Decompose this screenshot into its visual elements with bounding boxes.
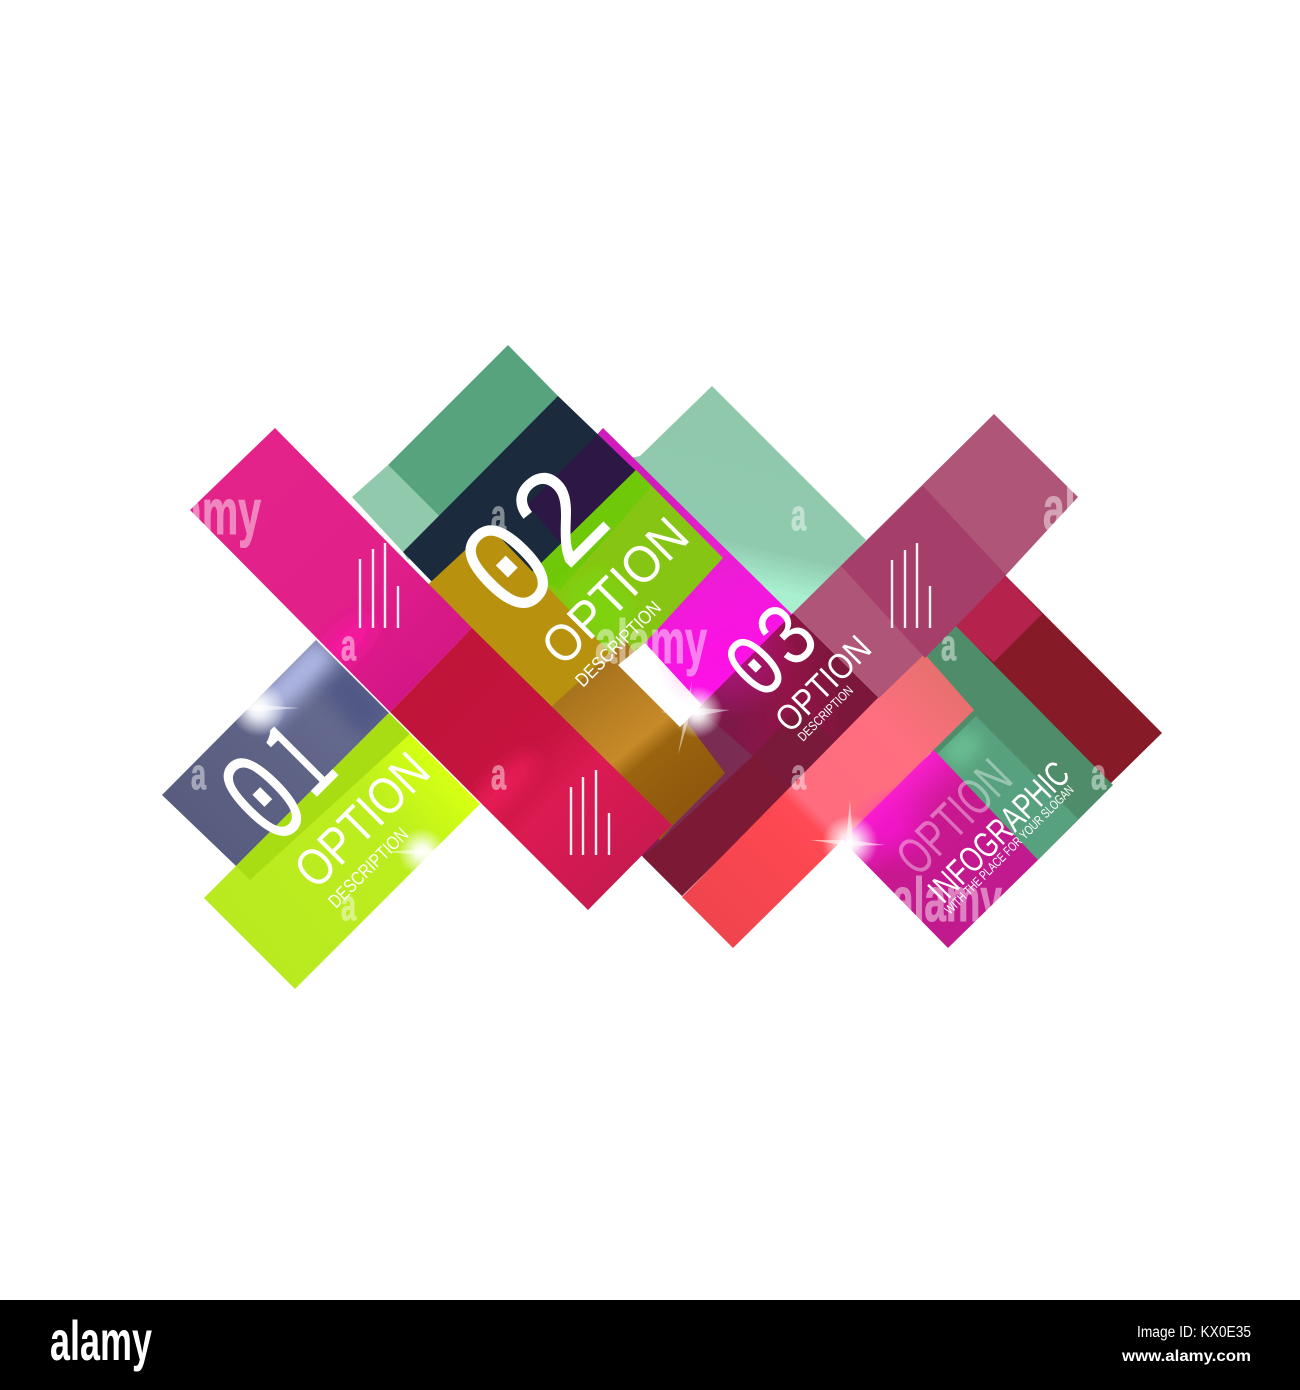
watermark: a	[191, 750, 206, 799]
number 03: 03	[707, 586, 843, 723]
heading: option 1: OPTION	[283, 742, 441, 899]
lens flares	[215, 680, 885, 876]
footer logo: alamy	[50, 1309, 152, 1372]
icon: bar lines centre	[571, 770, 609, 855]
glow accents	[655, 580, 940, 875]
watermark: a	[491, 491, 506, 540]
panel: top green band	[352, 345, 565, 560]
panel: slate band	[162, 636, 395, 866]
number 01: 0	[192, 727, 345, 880]
panel: long pink and crimson band	[190, 428, 672, 910]
panel: option 1 lime band	[204, 713, 480, 989]
number 01: 1	[220, 680, 365, 825]
option 2 text	[432, 440, 700, 692]
panel: mauve band	[793, 414, 1078, 698]
panel: coral band	[682, 652, 974, 948]
image id: Image ID: KX0E35	[1137, 1324, 1251, 1341]
panel: navy band	[403, 396, 636, 600]
panel: white gap	[618, 643, 702, 727]
heading: option 3: OPTION	[767, 627, 879, 740]
watermark: a	[791, 491, 806, 540]
icon: bar lines right	[892, 543, 930, 628]
panel: dark red band	[950, 570, 1162, 786]
panel: magenta band	[510, 428, 810, 730]
option 1 text	[178, 680, 441, 913]
watermark: a	[791, 750, 806, 799]
watermark: alamy	[595, 608, 707, 677]
title: infographic: INFOGRAPHIC	[920, 753, 1077, 911]
watermark: a	[941, 621, 956, 670]
icon: bar lines left	[360, 543, 398, 628]
slogan: WITH THE PLACE FOR YOUR SLOGAN	[942, 782, 1077, 917]
panel: right green band	[920, 620, 1113, 860]
panel: olive band	[420, 527, 725, 840]
heading: option 2: OPTION	[530, 507, 700, 676]
watermark: alamy	[145, 476, 261, 548]
description 1: DESCRIPTION	[325, 824, 413, 913]
option 3 text	[707, 586, 879, 744]
watermark: alamy	[1043, 475, 1153, 544]
website: www.alamy.com	[1121, 1348, 1251, 1365]
watermark	[145, 475, 1153, 935]
watermark: a	[341, 881, 356, 930]
panel: big teal band	[620, 386, 866, 620]
watermark: alamy	[892, 866, 1002, 935]
description 3: DESCRIPTION	[795, 683, 856, 744]
number 02: 02	[432, 440, 647, 655]
panel: option 3 maroon band	[600, 613, 879, 896]
description 2: DESCRIPTION	[572, 597, 666, 692]
faded heading: option: OPTION	[885, 749, 1023, 886]
watermark: a	[1091, 750, 1106, 799]
infographic title block	[885, 749, 1077, 917]
footer bar	[0, 1300, 1300, 1390]
panel: bottom-right magenta box	[840, 750, 1038, 948]
panel: option 2 green box	[530, 470, 723, 665]
watermark: a	[491, 750, 506, 799]
watermark: a	[341, 621, 356, 670]
